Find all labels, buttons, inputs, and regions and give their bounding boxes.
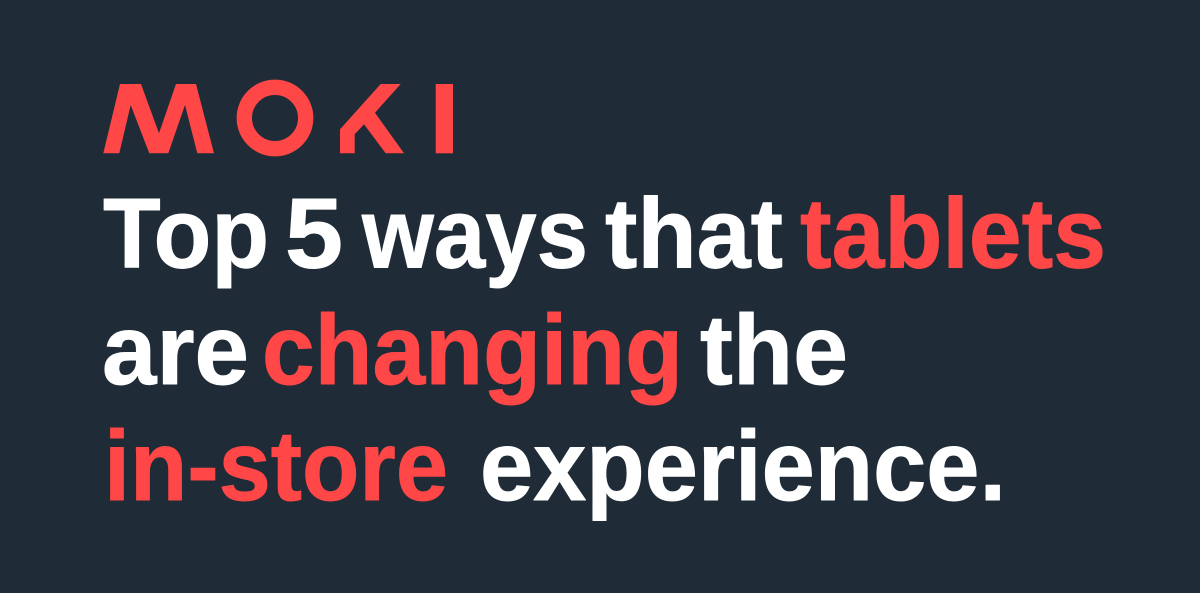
title line 1 bbox=[103, 177, 1106, 288]
title line 1: 5 bbox=[285, 177, 343, 288]
title line 1: ways bbox=[361, 177, 588, 288]
logo letter K bbox=[340, 84, 404, 153]
logo letter M bbox=[103, 84, 214, 153]
title line 3: in-store bbox=[104, 410, 448, 521]
title line 1: that bbox=[605, 177, 783, 288]
logo letter I bbox=[436, 84, 453, 153]
title line 2: the bbox=[700, 294, 848, 405]
title line 2: are bbox=[102, 294, 249, 405]
logo: MOKI bbox=[103, 84, 453, 153]
title bbox=[102, 177, 1106, 521]
title line 1: Top bbox=[103, 177, 269, 288]
title line 2: changing bbox=[262, 294, 683, 405]
title line 1: tablets bbox=[800, 177, 1106, 288]
title line 2 bbox=[102, 294, 848, 405]
title line 3: experience. bbox=[480, 410, 1006, 521]
title line 3 bbox=[104, 410, 1006, 521]
logo letter O bbox=[244, 87, 306, 149]
